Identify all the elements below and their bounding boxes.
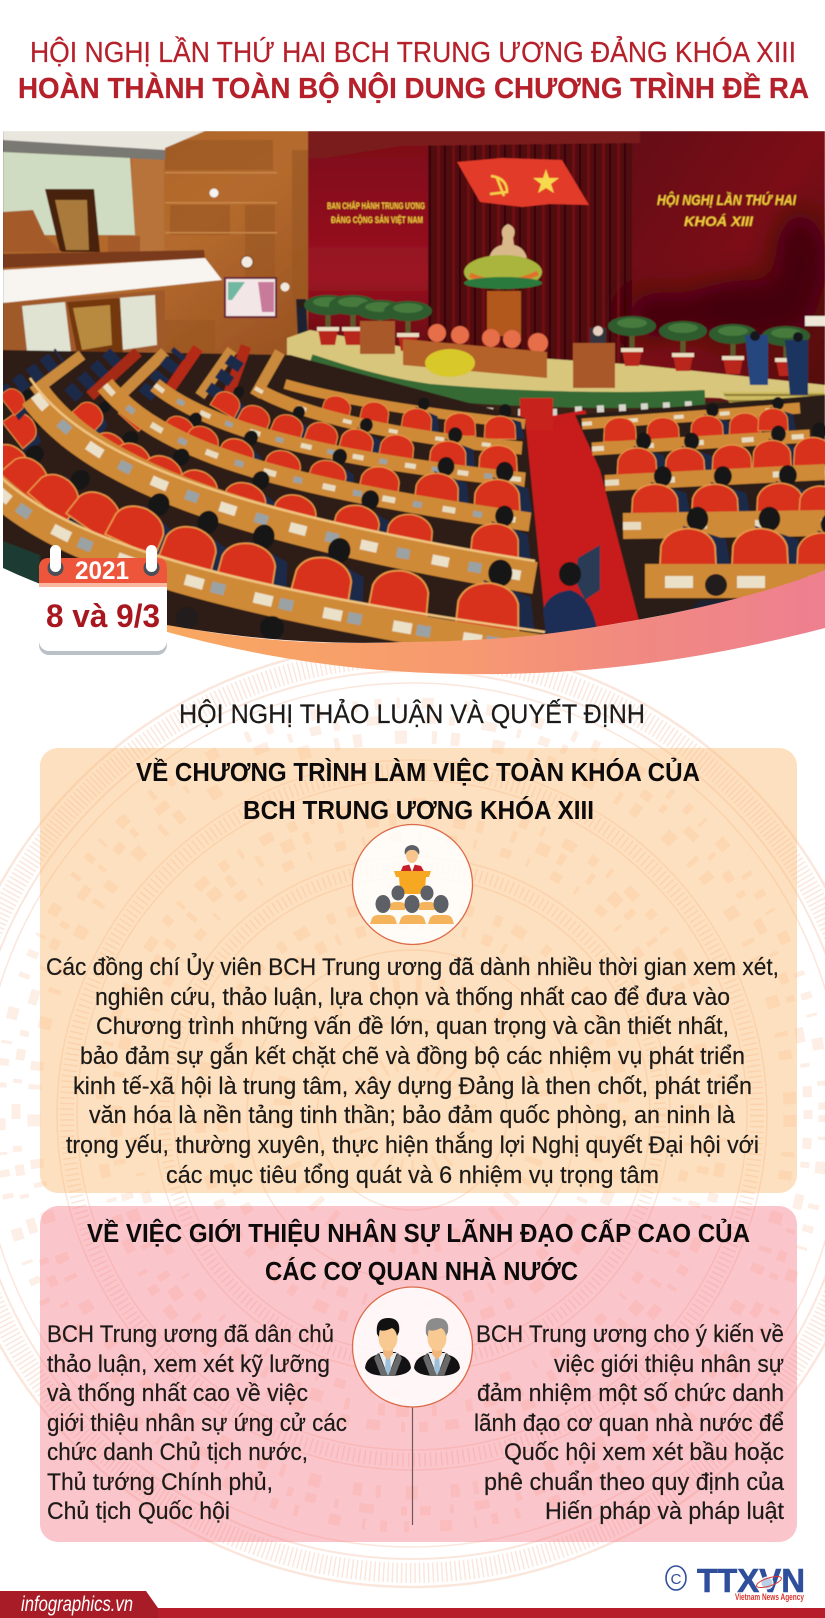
right column text: việc giới thiệu nhân sự [554,1351,784,1378]
left seating base [3,350,548,650]
red carpet [525,409,640,634]
right column text: lãnh đạo cơ quan nhà nước để [474,1410,784,1437]
wall lettering [327,191,797,229]
footer bar [0,1591,825,1618]
panel heading: VỀ VIỆC GIỚI THIỆU NHÂN SỰ LÃNH ĐẠO CẤP CAO CỦA [87,1218,750,1248]
lower wall and door [3,290,165,352]
icon: speaker and audience [352,824,472,944]
calendar year: 2021 [75,557,129,585]
title [18,36,809,105]
radial aisles top left [33,346,280,396]
wall lettering: KHOÁ XIII [684,213,754,229]
wall screen [225,278,276,317]
panel body text: trọng yếu, thường xuyên, thực hiện thắng lợi Nghị quyết Đại hội với [66,1132,759,1159]
wall lettering: BAN CHẤP HÀNH TRUNG ƯƠNG [327,201,425,212]
plant row [310,362,705,400]
panel heading: BCH TRUNG ƯƠNG KHÓA XIII [243,795,594,825]
presidium chairs, table, podiums [428,324,548,353]
panel body text: Chương trình những vấn đề lớn, quan trọng và cần thiết nhất, [96,1013,729,1040]
right column text: phê chuẩn theo quy định của [484,1469,785,1496]
panel body text: bảo đảm sự gắn kết chặt chẽ và đồng bộ các nhiệm vụ phát triển [80,1043,745,1070]
left column text: Thủ tướng Chính phủ, [47,1469,273,1496]
icon: two leaders [352,1287,472,1407]
flag [457,158,589,207]
right column text: Hiến pháp và pháp luật [545,1498,784,1525]
panel body text: Các đồng chí Ủy viên BCH Trung ương đã dành nhiều thời gian xem xét, [46,952,779,981]
upper door [45,189,100,252]
extra people far left [3,413,42,452]
wall lettering: ĐẢNG CỘNG SẢN VIỆT NAM [331,214,423,226]
panel body text: kinh tế-xã hội là trung tâm, xây dựng Đảng là then chốt, phát triển [73,1073,752,1100]
left column text: giới thiệu nhân sự ứng cử các [47,1410,347,1437]
panel: working programme [40,748,797,1193]
panel heading: VỀ CHƯƠNG TRÌNH LÀM VIỆC TOÀN KHÓA CỦA [136,757,700,787]
calendar badge [39,545,167,655]
balcony [3,210,62,252]
man with dark hair [365,1318,411,1376]
calendar rings [48,545,160,576]
panel body text: nghiên cứu, thảo luận, lựa chọn và thống nhất cao để đưa vào [95,984,730,1011]
stage floor and steps [286,329,825,401]
right column text: Quốc hội xem xét bầu hoặc [504,1439,784,1466]
decorative curved band under photo [160,568,825,674]
logo: TTXVN: C [670,1571,682,1588]
panel body text: các mục tiêu tổng quát và 6 nhiệm vụ trọng tâm [166,1162,659,1189]
left column text [47,1321,347,1525]
ceiling and upper wall [3,131,206,151]
bust, flowers, pedestal [489,224,527,258]
panel heading: CÁC CƠ QUAN NHÀ NƯỚC [265,1256,578,1286]
cameramen on stage [745,335,768,385]
right column text: BCH Trung ương cho ý kiến về [476,1321,784,1348]
panel body text: văn hóa là nền tảng tinh thần; bảo đảm quốc phòng, an ninh là [89,1102,736,1129]
calendar date: 8 và 9/3 [46,598,160,634]
wall lettering: HỘI NGHỊ LẦN THỨ HAI [657,191,797,209]
standing man on left [296,299,308,340]
right column text: đảm nhiệm một số chức danh [477,1380,784,1407]
people bottom left and front [176,607,198,629]
panel heading [87,1218,750,1286]
footer site name: infographics.vn [21,1593,133,1616]
section heading: HỘI NGHỊ THẢO LUẬN VÀ QUYẾT ĐỊNH [179,697,645,729]
left column text: Chủ tịch Quốc hội [47,1498,230,1525]
panel body text [46,952,779,1189]
curtains [308,145,429,346]
photo: conference hall [0,131,825,651]
title: HOÀN THÀNH TOÀN BỘ NỘI DUNG CHƯƠNG TRÌNH ĐỀ RA [18,72,809,105]
left rows of desks and seats [0,378,545,650]
photographer in aisle [543,590,598,634]
left column text: BCH Trung ương đã dân chủ [47,1321,334,1348]
logo: TTXVN: TTXVN [697,1562,805,1599]
clock and camera [241,256,253,268]
wood wall [3,131,328,366]
panel: senior personnel [40,1206,797,1542]
right column text [474,1321,785,1525]
right seating block [575,395,825,625]
panel heading [136,757,700,825]
man with grey hair [414,1318,460,1376]
divider line [412,1407,414,1525]
plants on stage [303,294,340,346]
left column text: thảo luận, xem xét kỹ lưỡng [47,1351,330,1378]
background: Dong Son drum watermark [0,643,825,1587]
left column text: chức danh Chủ tịch nước, [47,1439,308,1466]
left column text: và thống nhất cao về việc [47,1380,308,1407]
